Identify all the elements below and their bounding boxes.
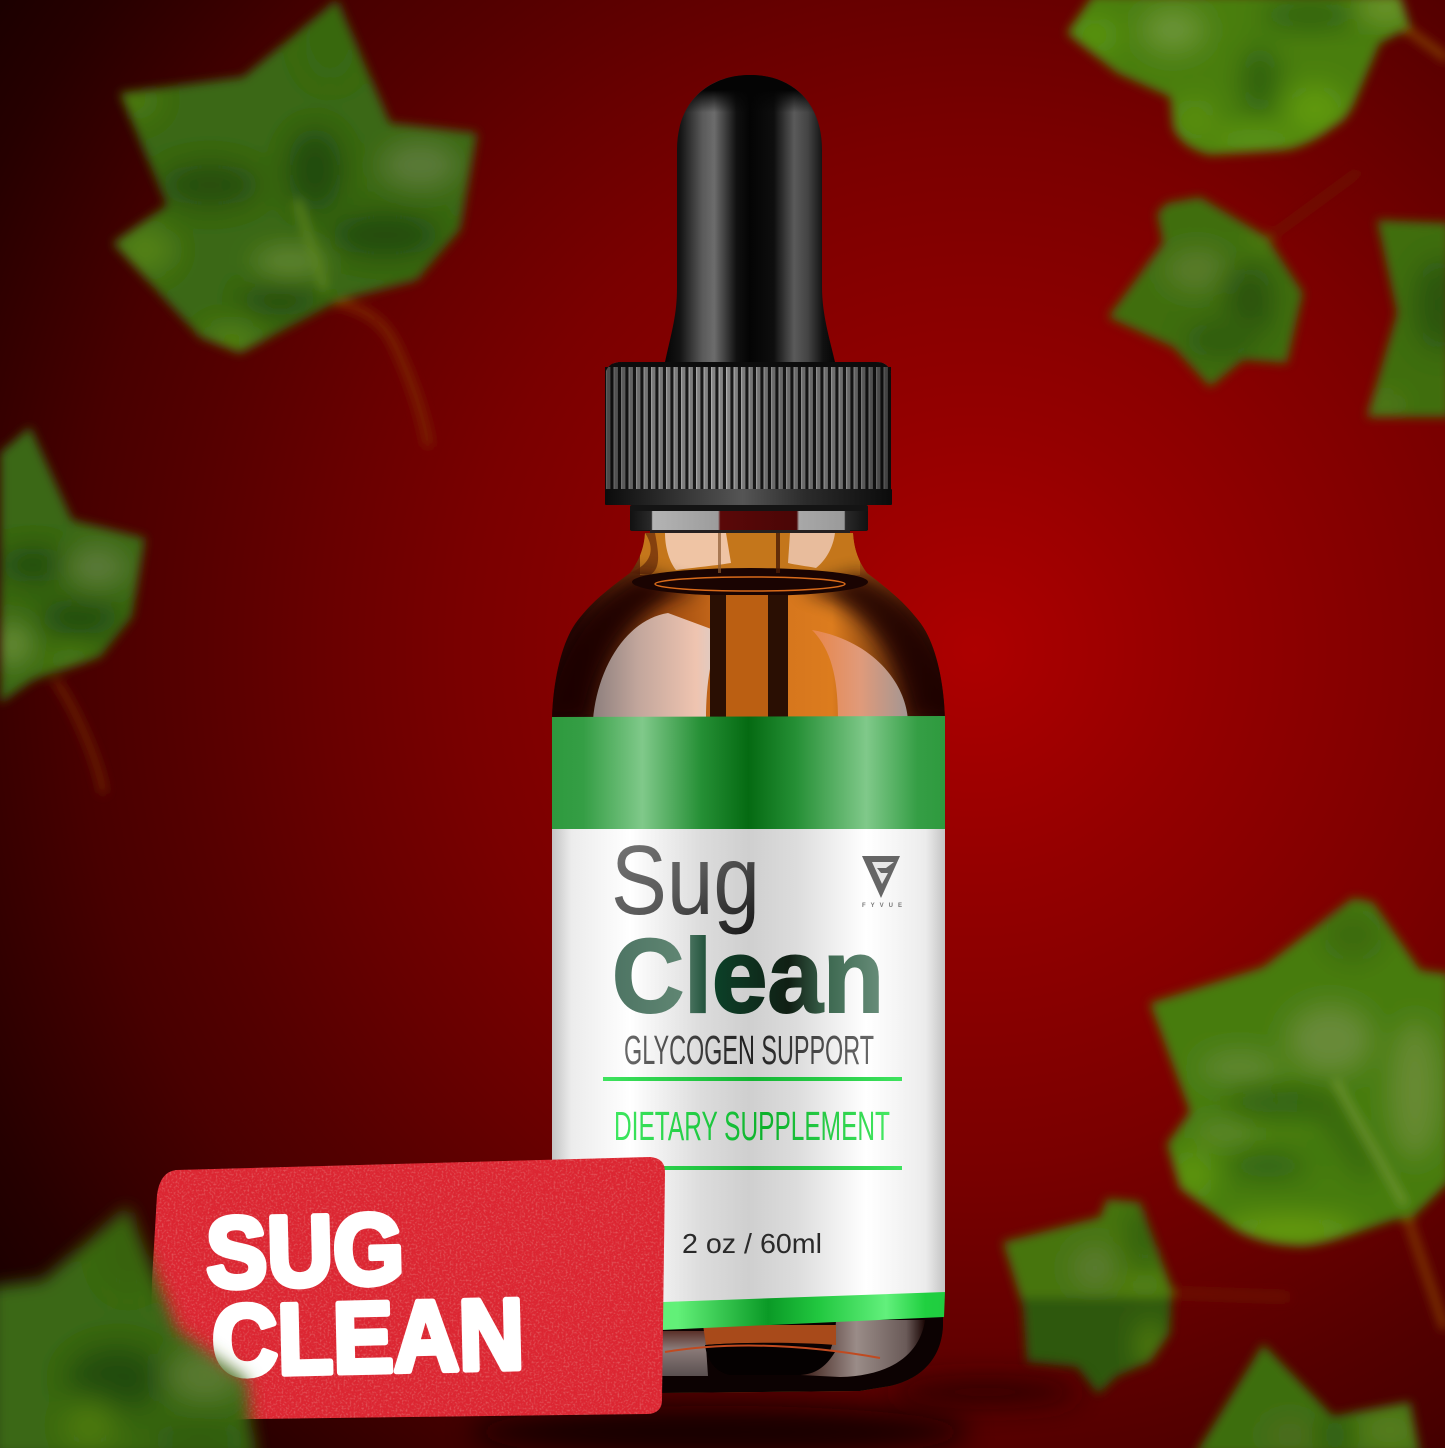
bottle xyxy=(540,75,960,1402)
leaf: bottom left foreground xyxy=(0,1200,275,1448)
brand: Sug: Sug xyxy=(611,825,760,935)
dietary supplement: DIETARY SUPPLEMENT xyxy=(614,1103,890,1149)
brand: Clean: Clean xyxy=(612,918,884,1035)
leaf: right middle xyxy=(1100,173,1357,390)
leaf: bottom right large xyxy=(1140,890,1445,1329)
leaf: right edge xyxy=(1360,210,1445,425)
ribbed cap xyxy=(605,362,892,505)
leaf: bottom right corner xyxy=(1190,1340,1430,1448)
logo xyxy=(862,856,902,909)
card text: SUG xyxy=(205,1193,405,1309)
card text xyxy=(205,1190,525,1397)
logo: FYVUE xyxy=(862,903,902,909)
label top green band xyxy=(552,716,945,829)
liquid line xyxy=(632,568,868,596)
dropper bulb xyxy=(665,75,835,362)
red card xyxy=(148,1157,665,1424)
label bottom green band xyxy=(552,1292,945,1335)
leaf: top right xyxy=(1060,0,1445,165)
volume: 2 oz / 60ml xyxy=(682,1228,822,1259)
neck glass xyxy=(640,530,860,575)
subtitle: GLYCOGEN SUPPORT xyxy=(624,1027,874,1073)
leaf: top left large xyxy=(100,0,490,443)
card text: CLEAN xyxy=(211,1278,525,1397)
dropper tube xyxy=(710,533,788,725)
leaf: bottom centre-right xyxy=(995,1190,1287,1408)
collar xyxy=(630,505,868,533)
highlight left xyxy=(593,613,710,717)
highlight right xyxy=(812,630,908,720)
bottom glass xyxy=(662,1317,943,1393)
leaf: left edge xyxy=(0,420,160,790)
glass body xyxy=(540,525,960,1402)
white label xyxy=(552,825,945,1306)
bottle shadow xyxy=(470,1379,1080,1448)
shoulder shade xyxy=(540,573,700,720)
